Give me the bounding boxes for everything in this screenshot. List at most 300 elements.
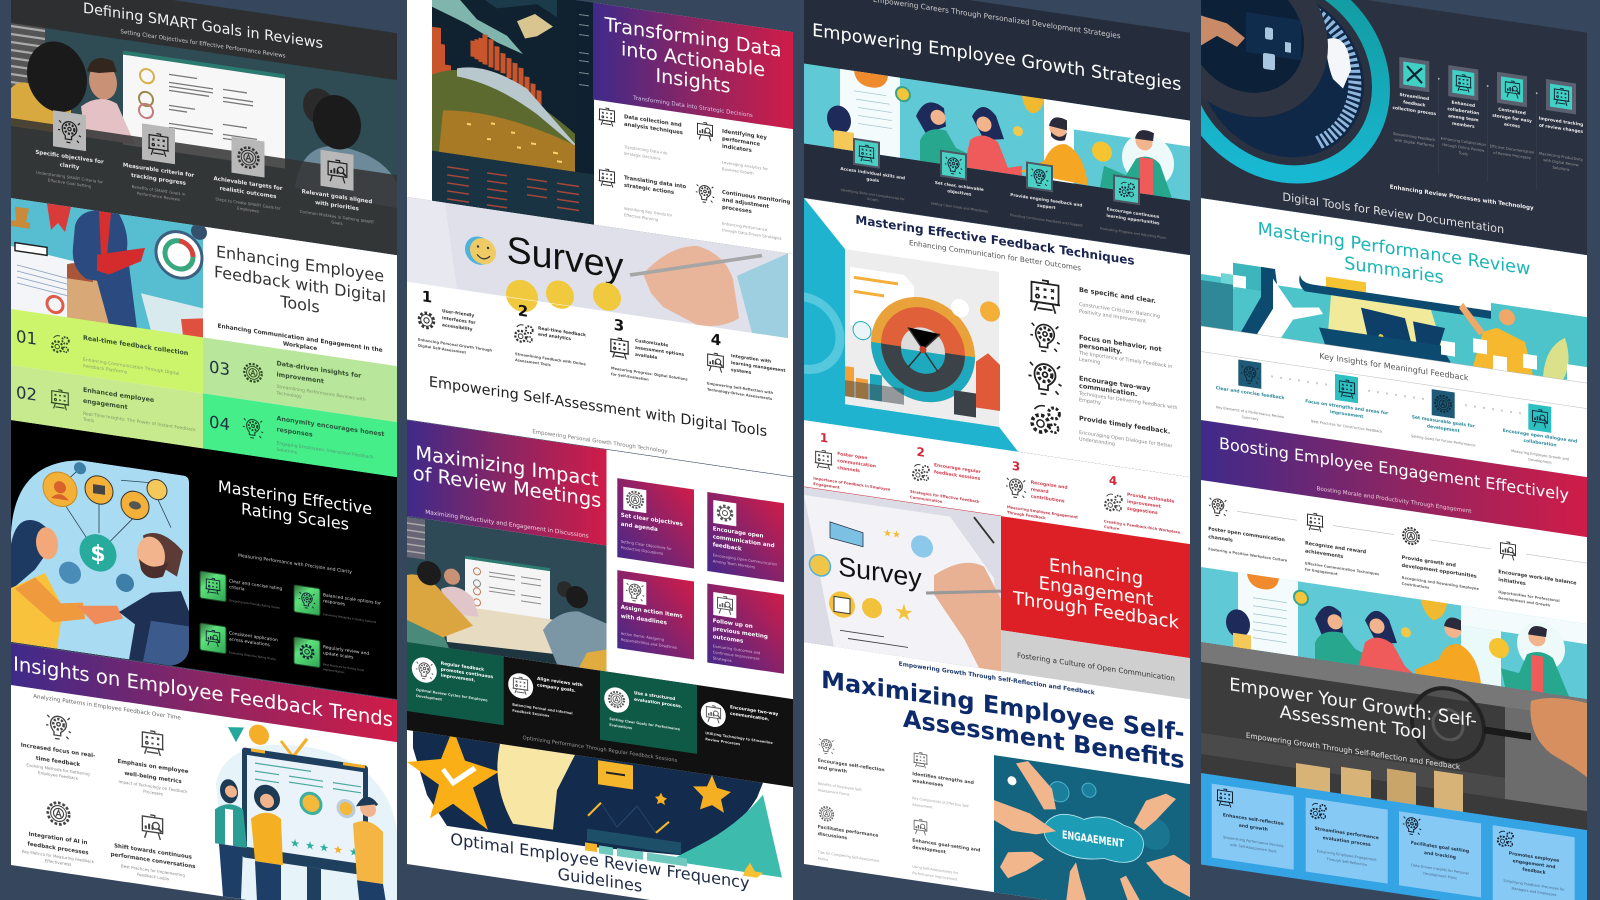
item: well-being: Impact of Technology on Feedback bbox=[118, 779, 188, 794]
item: KPI: Identifying key bbox=[722, 129, 767, 141]
item: recognize: Recognize and reward bbox=[1305, 540, 1367, 556]
item: shift: Shift towards continuous bbox=[114, 843, 193, 861]
card: clear objectives: Productive Discussions bbox=[621, 546, 663, 556]
item: two-way communication: communication. bbox=[730, 711, 770, 723]
item 1 bbox=[813, 429, 891, 497]
item 1: 1 bbox=[422, 287, 432, 307]
illustration: handshake: $ bbox=[90, 540, 106, 568]
item 1: interfaces for bbox=[442, 315, 476, 326]
item 2: 2 bbox=[917, 445, 925, 460]
item 3 bbox=[1006, 458, 1078, 525]
item: set objectives: objectives bbox=[947, 188, 972, 197]
item 4: learning management bbox=[731, 360, 785, 374]
subtitle: Empowering Growth Through Self-Reflection and Feedback bbox=[899, 661, 1096, 697]
item: relevant bbox=[300, 150, 374, 225]
item: discussions: Forms bbox=[818, 857, 828, 862]
subtitle: Workplace bbox=[283, 341, 317, 352]
card: open communication: Among Team Members bbox=[713, 559, 755, 570]
item 4: Technology-Driven Assessments bbox=[707, 387, 772, 401]
title: Tools bbox=[279, 292, 320, 317]
item 03: 03 bbox=[209, 357, 230, 379]
item: two-way: Encourage two-way bbox=[1079, 374, 1151, 393]
item 03 bbox=[203, 337, 397, 422]
item: monitoring bbox=[696, 184, 791, 242]
item: KPI: Business Growth bbox=[722, 166, 754, 176]
item 2: Strategies for Effective Feedback bbox=[910, 490, 980, 504]
item: continuous learning: Encourage continuous bbox=[1107, 206, 1160, 219]
subtitle: Analyzing Patterns in Employee Feedback Over Time bbox=[33, 694, 181, 722]
item: strengths: weaknesses bbox=[912, 778, 943, 789]
item: company goals: company goals. bbox=[537, 682, 576, 694]
card 2: evaluation process bbox=[1323, 835, 1371, 848]
card 3: Data-Driven Insights for Personal bbox=[1411, 863, 1469, 876]
card 3 bbox=[1399, 811, 1481, 897]
item: balanced: responses bbox=[323, 598, 346, 608]
title: Empower Your Growth: Self- bbox=[1229, 674, 1477, 732]
item: measurable bbox=[123, 121, 194, 204]
item: clear feedback: Summary bbox=[1242, 415, 1258, 421]
item: well-being: Processes bbox=[143, 789, 163, 796]
item 1: Enhancing Personal Growth Through bbox=[418, 338, 493, 353]
item 4: Integration with bbox=[731, 353, 771, 365]
item: access skills: Access individual skills and bbox=[840, 166, 905, 180]
decorative ring bbox=[768, 292, 840, 374]
item 1: Digital Self-Assessment bbox=[418, 344, 466, 355]
item: achievable bbox=[213, 134, 283, 217]
item: review: update scales bbox=[323, 650, 354, 661]
item: monitoring: and adjustment bbox=[722, 197, 769, 210]
title: Enhancing bbox=[1049, 555, 1143, 590]
panel: Empower Your Growth: Self-Assessment Tool bbox=[1201, 642, 1587, 900]
photo: survey bbox=[804, 487, 1001, 671]
title: Rating Scales bbox=[241, 499, 349, 534]
header bbox=[407, 420, 606, 546]
item: collaboration: members bbox=[1452, 121, 1475, 130]
title: Empowering Employee Growth Strategies bbox=[812, 20, 1181, 95]
item 1: 1 bbox=[820, 430, 828, 446]
photo: survey: Survey bbox=[838, 551, 922, 593]
item: growth: Recognizing and Rewarding Employee bbox=[1402, 576, 1479, 591]
item: continuous learning: Evaluating Progress and Adjusting Plans bbox=[1100, 226, 1166, 240]
item: clear feedback bbox=[1216, 356, 1285, 425]
title: Assessment Tool bbox=[1280, 702, 1426, 744]
card 3: Facilitates goal setting bbox=[1411, 840, 1469, 855]
item: data collection: Strategic Decisions bbox=[624, 151, 660, 161]
item 2: Streamlining Feedback with Online bbox=[515, 352, 586, 367]
item: shift bbox=[111, 814, 196, 880]
illustration: monitor with team: ★ bbox=[349, 845, 359, 859]
item: regular feedback: promotes continuous bbox=[441, 667, 493, 680]
item: collaboration: Enhancing Collaboration bbox=[1441, 136, 1487, 147]
item: relevant: Relevant goals aligned bbox=[302, 189, 372, 205]
item: specific and clear bbox=[1030, 278, 1160, 329]
item: discussions bbox=[817, 806, 880, 870]
item: regular feedback bbox=[412, 656, 493, 709]
item: strategic actions: Effective Planning bbox=[624, 212, 659, 222]
item 04: 04 bbox=[209, 412, 230, 434]
title: Digital Tools for Review Documentation bbox=[1282, 190, 1504, 236]
item: two-way communication: Review Processes bbox=[705, 737, 740, 746]
item: KPI bbox=[698, 122, 768, 178]
card: follow up bbox=[707, 583, 784, 674]
banner bbox=[11, 643, 397, 742]
item: work-life bbox=[1498, 541, 1587, 613]
subtitle: Enhancing Communication and Engagement in the bbox=[217, 324, 383, 354]
item: collaboration: among team bbox=[1448, 113, 1479, 124]
title: Insights bbox=[655, 64, 731, 98]
item 4: Culture bbox=[1104, 525, 1120, 531]
item: work-life: Opportunities for Professional bbox=[1498, 590, 1560, 603]
item 03: improvement bbox=[276, 371, 324, 385]
item: specific bbox=[35, 108, 104, 191]
item 04: Anonymity encourages honest bbox=[276, 415, 384, 438]
illustration: monitor with team: ★ bbox=[290, 836, 300, 851]
item: collaboration: collaboration bbox=[1447, 106, 1479, 117]
item: specific: clarity bbox=[60, 162, 80, 171]
illustration: engagement hands bbox=[994, 755, 1190, 900]
item: relevant: Common Mistakes in Defining SMART bbox=[300, 209, 375, 225]
panel: Mastering Performance Review Summaries bbox=[1201, 198, 1587, 477]
item: achievable: realistic outcomes bbox=[220, 186, 277, 200]
item: structured process: Use a structured bbox=[634, 690, 675, 702]
title: Defining SMART Goals in Reviews bbox=[83, 1, 323, 52]
item: AI: Integration of AI in bbox=[29, 832, 87, 846]
item: collaboration: Enhanced bbox=[1452, 100, 1475, 109]
item: tracking: Solutions bbox=[1552, 166, 1570, 172]
card 1: Streamlining Performance Reviews bbox=[1223, 835, 1284, 848]
item 02: Tools bbox=[82, 417, 95, 424]
item: measurable goals: Set measurable goals for bbox=[1412, 414, 1476, 430]
subtitle: Measuring Performance with Precision and Clarity bbox=[238, 553, 352, 575]
card 2 bbox=[1306, 797, 1388, 884]
item 3: available bbox=[635, 352, 657, 361]
item 02: engagement bbox=[83, 398, 128, 411]
title: Mastering Effective bbox=[218, 477, 372, 518]
item: balanced: Enhancing Reliability in Rating Systems bbox=[323, 612, 377, 624]
panel: Boosting Employee Engagement Effectively bbox=[1201, 420, 1587, 699]
card 4: Simplifying Feedback Processes for bbox=[1503, 879, 1565, 892]
panel: Digital Tools for Review Documentation bbox=[1176, 0, 1587, 255]
illustration: team handshake bbox=[1201, 567, 1587, 699]
item 04: responses bbox=[276, 426, 313, 439]
item: open dialogue: Measuring Employee Growth and bbox=[1511, 449, 1569, 461]
title: Through Feedback bbox=[1012, 588, 1179, 634]
item 02: 02 bbox=[16, 383, 37, 405]
item 4: Creating a Feedback-Rich Workplace bbox=[1104, 519, 1181, 535]
item: goal-setting: Using Self-Assessments for bbox=[912, 865, 959, 875]
title: Summaries bbox=[1344, 254, 1444, 288]
item: work-life: initiatives bbox=[1498, 577, 1526, 587]
card: action items bbox=[617, 570, 694, 659]
card 4: feedback bbox=[1522, 867, 1547, 876]
item 3: for Self-Evaluation bbox=[611, 372, 649, 382]
illustration: gauge bbox=[845, 249, 1000, 427]
illustration: star and chart bbox=[407, 722, 782, 882]
panel: Mastering Effective Rating Scales bbox=[11, 420, 397, 699]
panel: Mastering Effective Feedback Techniques bbox=[768, 193, 1190, 478]
item 4: improvement bbox=[1127, 499, 1162, 510]
item: behavior: personality. bbox=[1079, 341, 1122, 356]
item 04: Engaging Employees: Interactive Feedback bbox=[276, 440, 374, 461]
illustration: engagement hands: ENGAAEMENT bbox=[1062, 828, 1124, 850]
item: monitoring: through Data-Driven Strategies bbox=[722, 227, 782, 241]
item 3: Through Feedback bbox=[1007, 511, 1046, 520]
item: recognize: achievements bbox=[1305, 548, 1343, 560]
item 03: Data-driven insights for bbox=[276, 360, 362, 380]
banner bbox=[1201, 420, 1587, 537]
card 1: with Self-Assessment Tools bbox=[1230, 843, 1277, 854]
item: timely: Understanding bbox=[1079, 436, 1115, 448]
card: open communication: Encouraging Open Communication bbox=[713, 553, 778, 567]
card: follow up: Follow up on bbox=[713, 618, 753, 630]
item: KPI: indicators bbox=[722, 144, 752, 154]
item: storage: of Review Processes bbox=[1493, 151, 1531, 160]
card: open communication bbox=[707, 492, 784, 582]
item: strengths: Assessment bbox=[912, 803, 933, 810]
photo: meeting room bbox=[11, 23, 397, 208]
item: ongoing feedback: Providing Continuous Feedback and Support bbox=[1010, 213, 1083, 228]
item 3: Measuring Employee Engagement bbox=[1007, 505, 1078, 520]
item: structured process: Setting Clear Goals for Performance bbox=[609, 717, 681, 732]
item: growth: Contributions bbox=[1402, 582, 1429, 590]
item 2 bbox=[515, 301, 587, 373]
item: shift: Feedback Loops bbox=[137, 872, 169, 881]
item: communication: Fostering a Positive Workplace Culture bbox=[1208, 547, 1288, 563]
card 2: Streamlines performance bbox=[1315, 826, 1379, 841]
subtitle: Empowering Growth Through Self-Reflection and Feedback bbox=[1246, 731, 1461, 771]
item 04: Solutions bbox=[276, 447, 298, 456]
card: open communication: communication and bbox=[713, 534, 775, 549]
item: two-way bbox=[1028, 362, 1178, 418]
card 4 bbox=[1493, 825, 1575, 900]
item: well-being: well-being metrics bbox=[124, 771, 182, 785]
item 1: Engagement bbox=[813, 482, 840, 490]
photo: survey: ★ bbox=[894, 598, 914, 627]
title: Transforming Data bbox=[603, 13, 782, 62]
card: open communication: Encourage open bbox=[713, 526, 764, 540]
item 01 bbox=[11, 309, 204, 393]
item: measurable goals: Setting Goals for Future Performance bbox=[1411, 434, 1476, 448]
item 3: 3 bbox=[614, 316, 624, 335]
illustration: monitor with team: ★ bbox=[319, 841, 329, 855]
card: clear objectives bbox=[617, 478, 694, 568]
item: company goals: Align reviews with bbox=[537, 676, 583, 688]
panel: Transforming Data into Actionable Insights bbox=[407, 0, 793, 254]
item: regular feedback: Regular feedback bbox=[441, 661, 485, 673]
item: communication bbox=[1208, 498, 1297, 564]
item 3 bbox=[610, 315, 688, 388]
item 2 bbox=[910, 444, 982, 510]
item 1: Foster open bbox=[837, 451, 867, 461]
item 02 bbox=[11, 365, 204, 449]
subtitle: Optimizing Performance Through Regular Feedback Sessions bbox=[523, 735, 678, 764]
illustration: handshake bbox=[11, 460, 189, 666]
item: open dialogue: Encourage open dialogue and bbox=[1503, 428, 1577, 445]
item: data collection bbox=[599, 107, 683, 164]
item: strengths: Focus on strengths and areas for bbox=[1305, 398, 1389, 417]
item: communication: Foster open communication bbox=[1208, 526, 1285, 543]
item: review: Implementation bbox=[323, 667, 345, 674]
title: Optimal Employee Review Frequency bbox=[450, 830, 750, 893]
cyan backdrop bbox=[804, 198, 1019, 453]
photo: survey: ★★ bbox=[883, 528, 901, 541]
item: consistent: Consistent application bbox=[229, 630, 278, 644]
item: access skills: Identifying Skills and Competencies for bbox=[841, 188, 905, 202]
item: real-time bbox=[21, 711, 95, 783]
item 1: User-friendly bbox=[442, 308, 474, 319]
item 3: Customizable bbox=[635, 338, 668, 349]
item: goal-setting: Performance Improvement bbox=[912, 871, 958, 882]
card: follow up: Evaluating Outcomes and bbox=[713, 644, 761, 655]
item: strengths bbox=[912, 751, 974, 816]
item: self-reflection: Benefits of Employee Self- bbox=[818, 782, 863, 792]
item: open dialogue: Development bbox=[1528, 457, 1552, 465]
item: consistent bbox=[200, 623, 278, 662]
item: continuous learning: learning opportunities bbox=[1106, 213, 1160, 226]
item 01: Enhancing Communication Through Digital bbox=[83, 357, 179, 377]
item: streamlined: with Digital Platforms bbox=[1394, 138, 1434, 148]
title: Engagement bbox=[1039, 573, 1153, 611]
item: specific and clear: Be specific and clear. bbox=[1079, 286, 1156, 305]
subtitle: Enhancing Communication for Better Outcomes bbox=[909, 238, 1081, 273]
item: balanced bbox=[294, 585, 381, 625]
item 2: Real-time feedback bbox=[538, 325, 587, 339]
card: open communication: feedback bbox=[713, 542, 742, 553]
divider bbox=[804, 487, 1001, 516]
illustration: monitor with team bbox=[215, 718, 397, 900]
item: achievable: Steps to Create SMART Goals for bbox=[215, 196, 281, 211]
item: ongoing feedback: support bbox=[1037, 203, 1056, 210]
item: measurable: Benefits of SMART Goals in bbox=[132, 184, 186, 197]
item 1 bbox=[418, 287, 493, 359]
item: access skills bbox=[840, 136, 905, 207]
title: of Review Meetings bbox=[413, 461, 601, 512]
item: clear feedback: Key Elements of a Performance Review bbox=[1216, 405, 1284, 419]
card: clear objectives: and agenda bbox=[621, 522, 658, 533]
illustration: monitor with team: ★ bbox=[305, 839, 315, 853]
item: AI bbox=[22, 801, 94, 866]
panel: Defining SMART Goals in Reviews bbox=[11, 0, 397, 255]
item 4: 4 bbox=[711, 330, 721, 349]
item: two-way communication: Encourage two-way bbox=[730, 704, 778, 717]
photo: survey: Survey bbox=[507, 228, 623, 287]
item: strengths: improvement bbox=[1330, 409, 1364, 420]
item: data collection: Data collection and bbox=[624, 114, 682, 129]
item: monitoring: processes bbox=[722, 205, 752, 215]
item: work-life: Encourage work-life balance bbox=[1498, 569, 1577, 587]
bottom band bbox=[11, 118, 397, 255]
column 2 slides bbox=[407, 0, 793, 900]
item: discussions: Tips for Completing Self-Assessment bbox=[817, 850, 880, 863]
card: follow up: Continuous Improvement bbox=[713, 650, 760, 661]
card 2: Enhancing Employee Engagement bbox=[1317, 849, 1377, 862]
item: self-reflection bbox=[818, 738, 885, 802]
item: regular feedback: Development bbox=[416, 694, 442, 702]
title: Mastering Performance Review bbox=[1258, 219, 1530, 280]
title: Maximizing Employee Self- bbox=[821, 666, 1185, 747]
item 02: Real-Time Insights: The Power of Instant Feedback bbox=[83, 411, 196, 433]
title: Enhancing Employee bbox=[216, 242, 384, 286]
photo: data landscape bbox=[432, 0, 594, 225]
title: Guidelines bbox=[558, 864, 642, 896]
item: data collection: analysis techniques bbox=[624, 122, 683, 136]
item: real-time: Evolving Methods for Gathering bbox=[26, 762, 90, 777]
title band bbox=[11, 0, 397, 80]
panel: Empowering Self-Assessment with Digital Tools bbox=[407, 197, 793, 477]
card 3: Development Plans bbox=[1423, 871, 1457, 880]
illustration: team handshake bbox=[804, 64, 1190, 201]
connector dots bbox=[1271, 376, 1526, 414]
item: behavior: Learning bbox=[1079, 357, 1100, 366]
card: action items: Responsibilities and Deadlines bbox=[621, 638, 677, 650]
item: KPI: performance bbox=[722, 136, 760, 148]
item: structured process bbox=[604, 686, 683, 738]
item: measurable: Measurable criteria for bbox=[123, 163, 194, 179]
card: follow up: outcomes bbox=[713, 634, 744, 645]
item: strengths bbox=[1305, 369, 1389, 435]
item: timely bbox=[1032, 404, 1173, 456]
item: growth: development opportunities bbox=[1402, 563, 1477, 580]
subtitle: Fostering a Culture of Open Communication bbox=[1017, 651, 1175, 683]
card 4: Promotes employee bbox=[1509, 851, 1559, 864]
item 2: feedback sessions bbox=[934, 469, 981, 482]
dividers bbox=[1438, 78, 1538, 189]
title: Maximizing Impact bbox=[415, 441, 599, 491]
item: monitoring: Enhancing Performance bbox=[722, 221, 768, 232]
item: recognize: Effective Communication Techniques bbox=[1305, 561, 1379, 576]
item: consistent: across evaluations bbox=[229, 636, 270, 648]
item 02: Enhanced employee bbox=[83, 387, 154, 404]
item: collaboration: through Online Review bbox=[1442, 143, 1484, 153]
item 2: Assessment Tools bbox=[515, 358, 551, 367]
item: streamlined: collection process bbox=[1393, 105, 1437, 117]
item 3: 3 bbox=[1012, 459, 1020, 474]
feedback band bbox=[407, 642, 793, 787]
item: structured process: Evaluations bbox=[609, 723, 632, 730]
illustration: laptop mosaic bbox=[1201, 258, 1587, 383]
item: specific and clear: Constructive Criticism: Balancing bbox=[1079, 302, 1160, 320]
card: action items: Action Items: Assigning bbox=[621, 632, 665, 642]
item: shift: performance conversations bbox=[111, 852, 196, 870]
magnifier bbox=[1412, 683, 1531, 773]
item 3: contributions bbox=[1031, 494, 1065, 505]
subtitle: Enhancing Review Processes with Technology bbox=[1390, 184, 1534, 212]
card 4: engagement and bbox=[1513, 858, 1555, 870]
item: set objectives: Setting Clear Goals and Milestones bbox=[931, 201, 988, 214]
item: self-reflection: and growth bbox=[818, 765, 847, 775]
item: ongoing feedback bbox=[1010, 159, 1083, 228]
item: growth: Provide growth and bbox=[1402, 555, 1456, 569]
item 1: communication bbox=[837, 458, 876, 470]
title: Boosting Employee Engagement Effectively bbox=[1219, 434, 1569, 505]
item: consistent: Evaluating Objective Rating Scales bbox=[229, 650, 276, 661]
item: well-being bbox=[118, 730, 188, 796]
item: specific: Understanding SMART Criteria for bbox=[36, 170, 103, 185]
item: streamlined: Streamlined bbox=[1400, 92, 1429, 102]
item 2: and analytics bbox=[538, 331, 571, 342]
item: review: Best Practices for Rating Scale bbox=[323, 662, 364, 672]
item: strategic actions: Identifying Key Trends for bbox=[624, 206, 673, 218]
item 3: Recognize and bbox=[1031, 480, 1068, 491]
title: Feedback with Digital bbox=[214, 262, 386, 306]
item: two-way: communication. bbox=[1079, 382, 1137, 398]
item 1: Importance of Feedback in Employee bbox=[813, 476, 891, 492]
item 4: systems bbox=[731, 367, 752, 376]
item: achievable: Achievable targets for bbox=[213, 176, 283, 192]
card 4: Managers and Employees bbox=[1512, 886, 1557, 897]
item: storage: access bbox=[1504, 122, 1520, 130]
subtitle: Maximizing Productivity and Engagement in Discussions bbox=[425, 510, 589, 540]
